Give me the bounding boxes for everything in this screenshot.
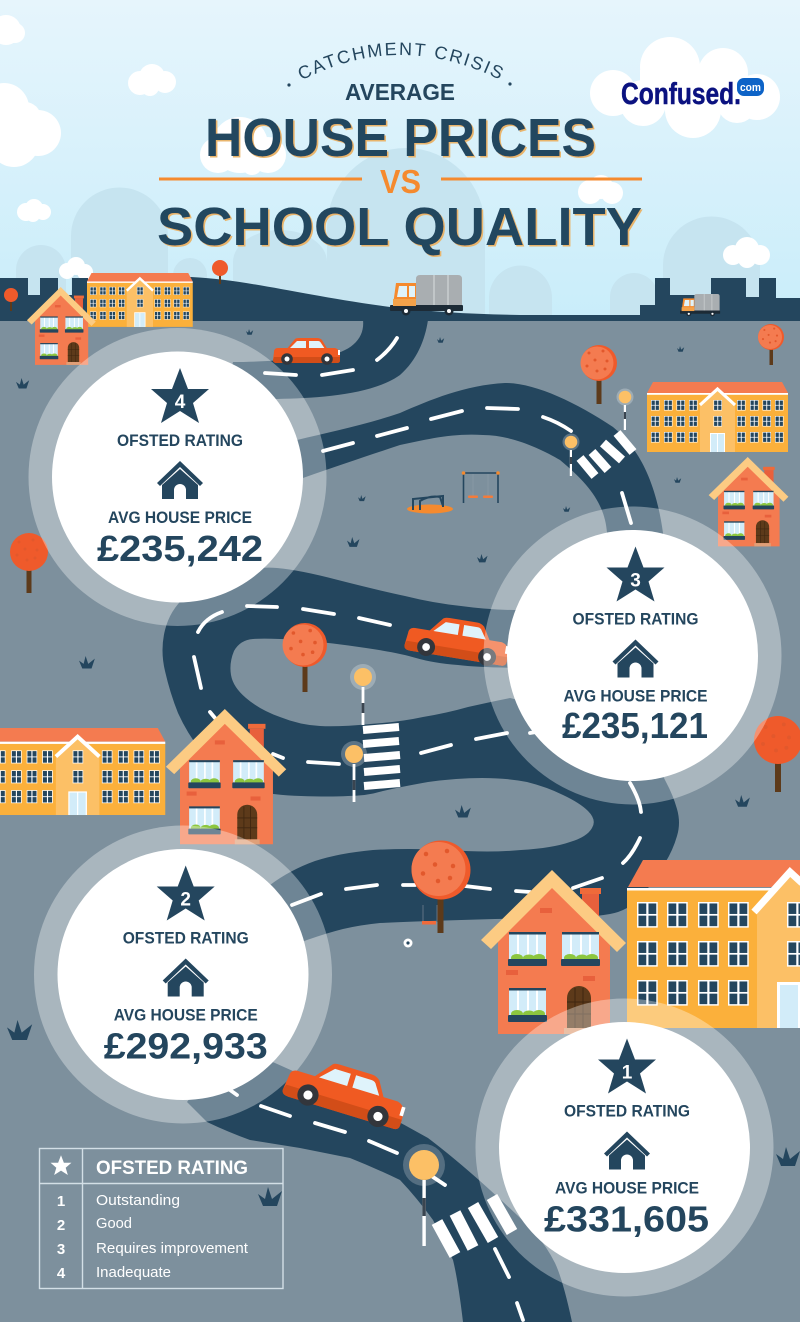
legend rows: 3 [57,1241,65,1258]
heading: house prices: HOUSE PRICES [205,108,596,168]
logo: Confused.com: Confused. [621,76,741,111]
star badge [598,1038,656,1094]
price: £235,242 [97,528,263,569]
road dashes [194,338,641,1320]
large tree with swing [412,840,470,933]
tree top left [212,260,228,284]
grass tufts [7,329,800,1166]
football [404,938,412,948]
star badge [157,866,215,920]
car: top [273,338,340,365]
heading: school quality: SCHOOL QUALITY [157,197,642,257]
star badge [151,368,209,423]
cloud behind logo [590,37,780,138]
subtitle: catchment crisis: CATCHMENT CRISIS [298,42,503,78]
heading: vs: VS [380,163,421,200]
legend rows: Requires improvement [96,1240,249,1257]
lamp [350,664,376,725]
icon: house [612,640,658,678]
street lamps [341,388,634,802]
house: right [709,457,788,546]
legend rows: Good [96,1215,132,1232]
price: £292,933 [104,1026,268,1066]
logo: Confused.com: com [740,82,761,94]
label: avg house price: AVG HOUSE PRICE [108,509,252,527]
label: avg house price: AVG HOUSE PRICE [555,1180,699,1198]
school: large bottom right [627,860,800,1028]
legend rows: 2 [57,1217,65,1234]
label: ofsted rating: OFSTED RATING [123,928,249,948]
house: middle [166,709,286,844]
tree [10,533,48,593]
label: avg house price: AVG HOUSE PRICE [564,688,708,706]
circle 3 [507,530,758,781]
heading: average: AVERAGE [345,79,455,105]
legend rows: Inadequate [96,1264,171,1281]
circle 4 [52,352,303,602]
tree [282,623,327,692]
legend: ofsted rating [39,1148,283,1289]
star badge: 1 [622,1062,633,1084]
playground [407,471,500,514]
legend heading: OFSTED RATING [96,1158,248,1179]
label: ofsted rating: OFSTED RATING [572,610,698,628]
label: ofsted rating: OFSTED RATING [564,1102,690,1120]
car: middle [403,612,512,669]
ground [0,321,800,1322]
translucent rings [28,328,782,1296]
icon: house [163,958,209,996]
crossing: bottom [437,1197,512,1255]
label: ofsted rating: OFSTED RATING [117,431,243,450]
clouds [0,15,770,280]
truck large [390,275,463,316]
legend rows: 1 [57,1193,65,1210]
crossing: middle [363,727,400,786]
circle 2 [58,849,308,1100]
title block [157,42,642,257]
lamp [341,741,367,802]
roundabout [407,496,453,514]
car: bottom [280,1051,412,1134]
swings [462,471,500,503]
circle 1 [499,1022,750,1273]
zebra crossings [363,433,633,1255]
school: middle left [0,728,165,815]
icon: tuft [258,1187,282,1206]
star badge: 4 [175,392,186,413]
legend rows [57,1192,249,1282]
star badge [606,546,664,602]
trucks [390,275,720,316]
skyline and hill [0,277,800,321]
house: large [481,870,626,1034]
truck small [680,294,720,316]
icon: house [604,1132,650,1170]
school: top left [87,273,193,327]
lamp: bottom [403,1144,445,1246]
road [162,320,679,1322]
tree [580,345,617,404]
background domes [16,148,760,320]
sky background [0,0,800,322]
icon: house [157,461,203,499]
tree far left [4,288,18,311]
legend rows: Outstanding [96,1192,180,1209]
school: top right [647,382,788,452]
icon: star [51,1155,71,1175]
star badge: 3 [630,570,641,592]
tree [758,324,784,365]
tree right edge [754,716,800,792]
trees [4,260,800,792]
crossing: top [580,433,633,476]
star badge: 2 [180,890,191,910]
lamp [562,434,580,476]
price: £331,605 [544,1198,709,1240]
label: avg house price: AVG HOUSE PRICE [114,1006,258,1024]
lamp [616,388,634,430]
heading: vs [159,163,642,200]
house: top left [27,287,96,365]
price: £235,121 [562,705,708,746]
legend rows: 4 [57,1265,66,1282]
